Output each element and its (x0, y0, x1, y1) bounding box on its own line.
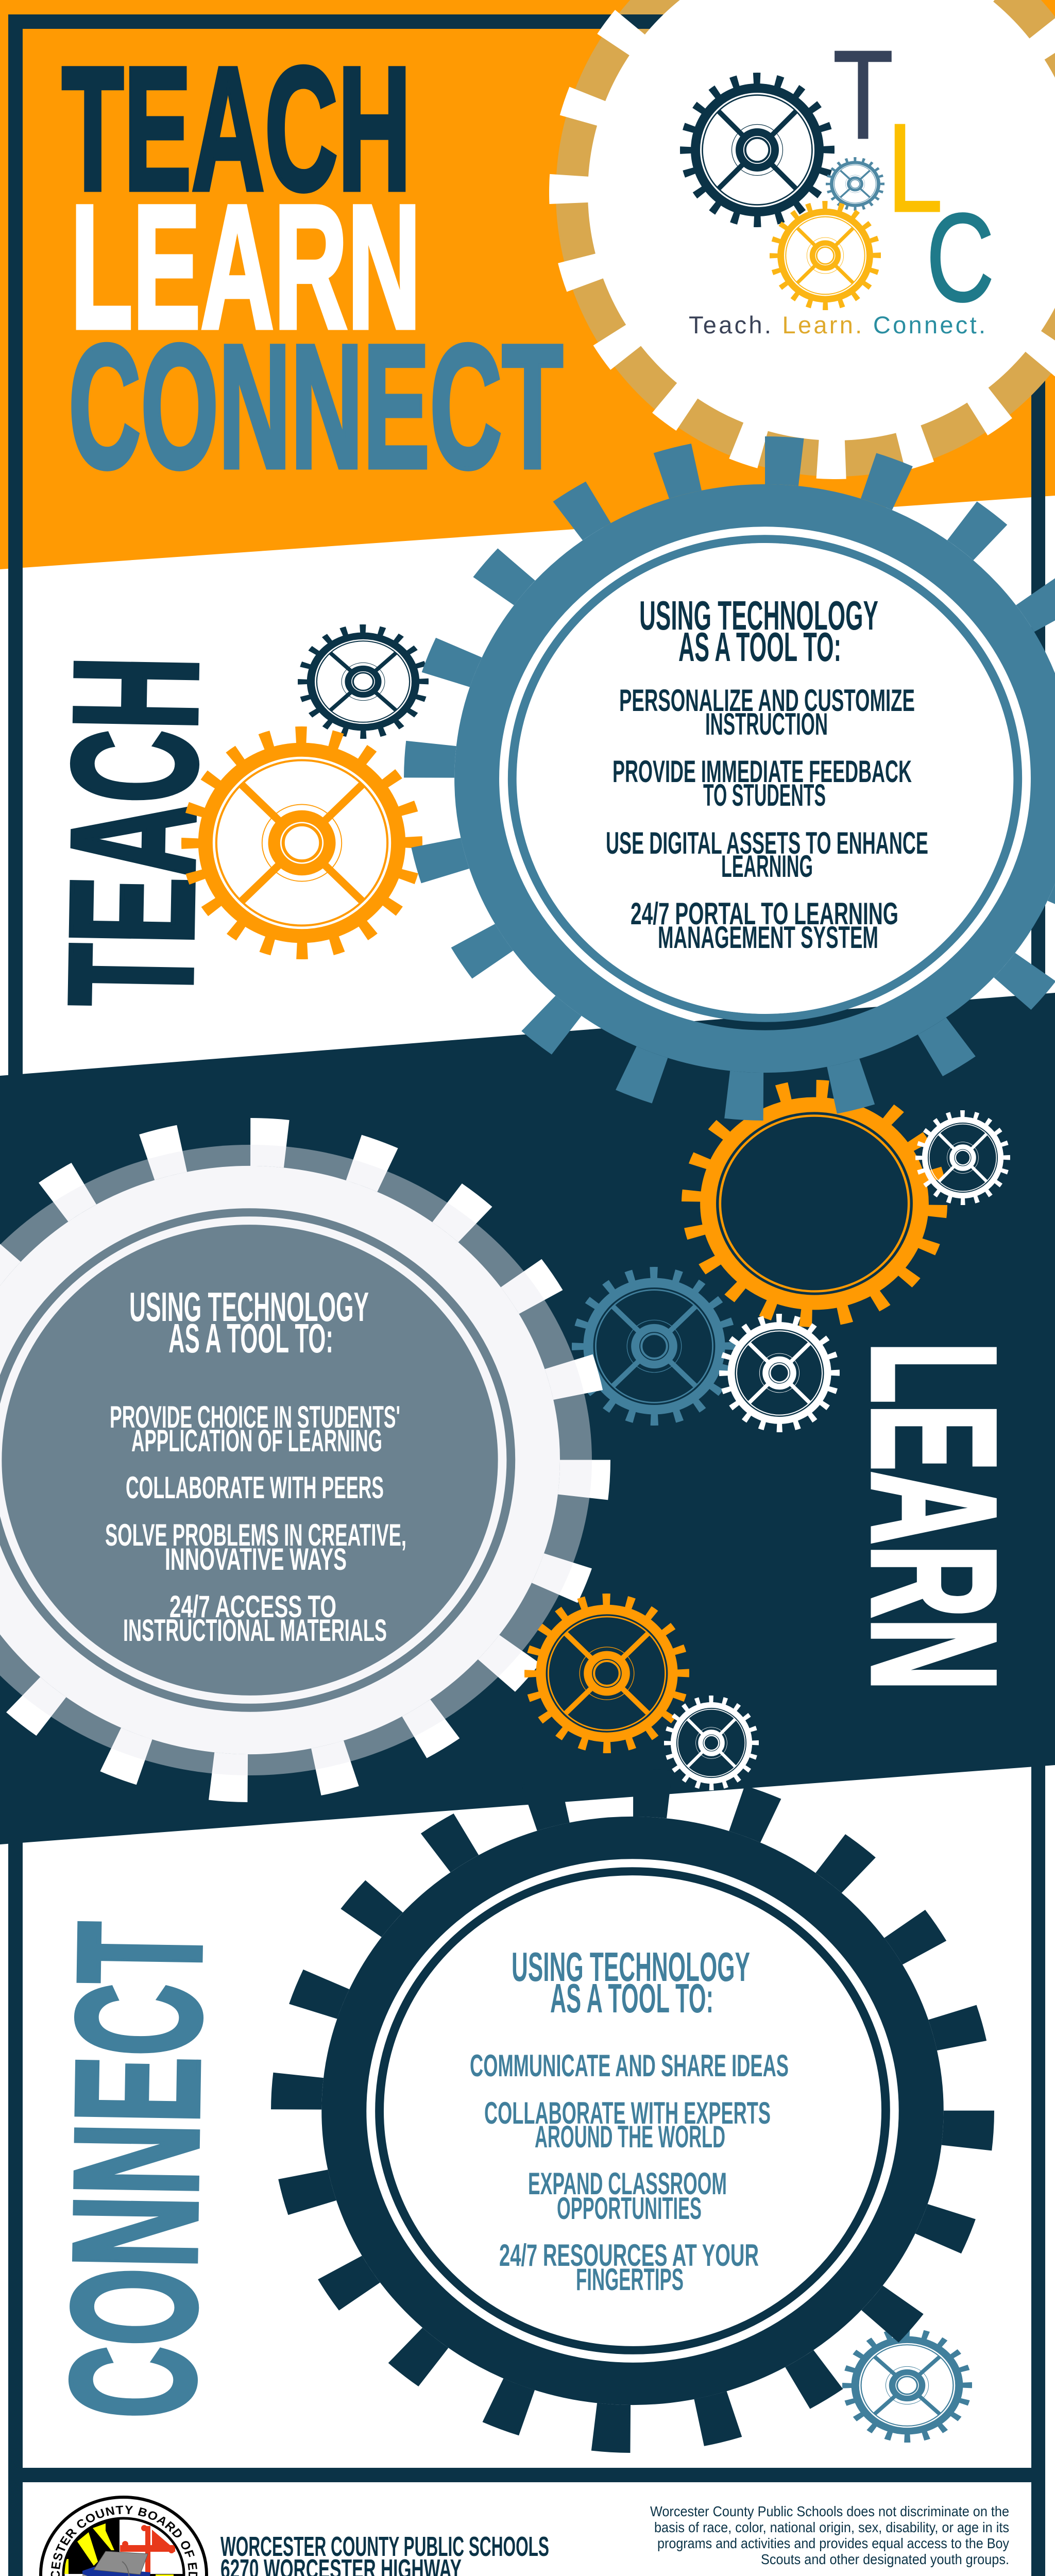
seal flag (64, 2519, 183, 2576)
connect list: OPPORTUNITIES (557, 2191, 702, 2226)
connect list: 24/7 RESOURCES AT YOUR (499, 2238, 759, 2273)
learn orange ring gear (684, 1082, 945, 1325)
learn white gear middle (724, 1318, 835, 1428)
teach small navy gear (303, 629, 423, 734)
teach list: LEARNING (721, 849, 813, 884)
learn list: 24/7 ACCESS TO (169, 1589, 336, 1624)
teach heading (639, 592, 878, 670)
big navy connect gear (276, 1773, 990, 2448)
school board seal (39, 2496, 208, 2576)
gear white centre (517, 543, 1013, 1014)
connect list: AROUND THE WORLD (535, 2120, 725, 2154)
connect list: EXPAND CLASSROOM (528, 2166, 727, 2201)
logo letter T: T (833, 24, 893, 165)
non-discrimination notice: basis of race, color, national origin, sex, disability, or age in its (654, 2519, 1009, 2535)
frame: footer divider (8, 2468, 1045, 2482)
seal rings (41, 2497, 207, 2576)
learn blue gear (578, 1273, 730, 1419)
connect text block (470, 1944, 789, 2297)
connect list: FINGERTIPS (576, 2262, 684, 2297)
frame: left bar (8, 14, 23, 2576)
logo letter L: L (887, 97, 943, 238)
non-discrimination notice: programs and activities and provides equal access to the Boy (657, 2535, 1009, 2551)
learn list (105, 1400, 406, 1648)
learn list: SOLVE PROBLEMS IN CREATIVE, (105, 1518, 406, 1552)
learn list: COLLABORATE WITH PEERS (126, 1470, 384, 1505)
learn heading: USING TECHNOLOGY (129, 1284, 369, 1330)
footer address: WORCESTER COUNTY PUBLIC SCHOOLS (220, 2531, 549, 2562)
learn list: INNOVATIVE WAYS (165, 1542, 347, 1577)
footer address (220, 2531, 549, 2576)
learn list: PROVIDE CHOICE IN STUDENTS' (110, 1400, 400, 1434)
learn heading (129, 1284, 369, 1361)
teach list: TO STUDENTS (703, 778, 826, 812)
teach heading: AS A TOOL TO: (678, 624, 841, 670)
non-discrimination notice: Worcester County Public Schools does not discriminate on the (650, 2503, 1009, 2519)
big blue teach gear (409, 442, 1055, 1115)
learn orange gear lower (531, 1600, 683, 1747)
connect list (470, 2048, 789, 2297)
teach text block (606, 592, 928, 955)
big white learn gear (0, 1123, 606, 1798)
teach list (606, 683, 928, 955)
title word: learn: LEARN (71, 168, 421, 365)
logo gear: navy (686, 79, 828, 221)
title word: connect: CONNECT (69, 308, 563, 505)
teach list: 24/7 PORTAL TO LEARNING (631, 896, 898, 931)
TLC logo (686, 24, 994, 338)
connect heading: AS A TOOL TO: (550, 1975, 713, 2021)
gear rim (409, 442, 1055, 1115)
dark navy learn band (0, 993, 1055, 1844)
connect list: COLLABORATE WITH EXPERTS (484, 2096, 771, 2130)
connect list: COMMUNICATE AND SHARE IDEAS (470, 2048, 789, 2083)
connect heading: USING TECHNOLOGY (512, 1944, 750, 1990)
translucent disc overlay (0, 1145, 592, 1775)
learn text block (105, 1284, 406, 1648)
gold disc behind logo gear (556, 0, 1055, 477)
seal books and cap (81, 2551, 151, 2576)
title: TEACH LEARN CONNECT (62, 30, 563, 505)
gear rim (0, 1123, 606, 1798)
logo letter C: C (926, 187, 994, 328)
connect blue small gear (847, 2333, 967, 2438)
non-discrimination notice: Scouts and other designated youth groups. (761, 2551, 1009, 2567)
learn list: INSTRUCTIONAL MATERIALS (123, 1613, 387, 1648)
learn heading: AS A TOOL TO: (168, 1315, 333, 1361)
frame: right bar (1031, 14, 1045, 2576)
logo tagline: Teach. Learn. Connect. (689, 311, 985, 338)
frame: top bar (8, 14, 678, 29)
orange header band (0, 0, 1055, 569)
logo gear: yellow (774, 205, 876, 306)
title word: teach: TEACH (62, 30, 411, 227)
section label: LEARN: LEARN (836, 1342, 1032, 1691)
white logo gear (565, 0, 1055, 464)
section label: TEACH: TEACH (32, 655, 235, 1008)
non-discrimination notice (650, 2503, 1009, 2576)
teach list: INSTRUCTION (705, 707, 828, 741)
learn white gear lower (668, 1699, 755, 1787)
learn white gear top right (919, 1114, 1007, 1201)
teach orange gear (191, 736, 413, 950)
connect heading (512, 1944, 750, 2021)
teach list: MANAGEMENT SYSTEM (658, 920, 878, 955)
learn list: APPLICATION OF LEARNING (131, 1423, 382, 1458)
section label: CONNECT: CONNECT (34, 1921, 239, 2420)
logo gear: blue small (828, 159, 882, 209)
